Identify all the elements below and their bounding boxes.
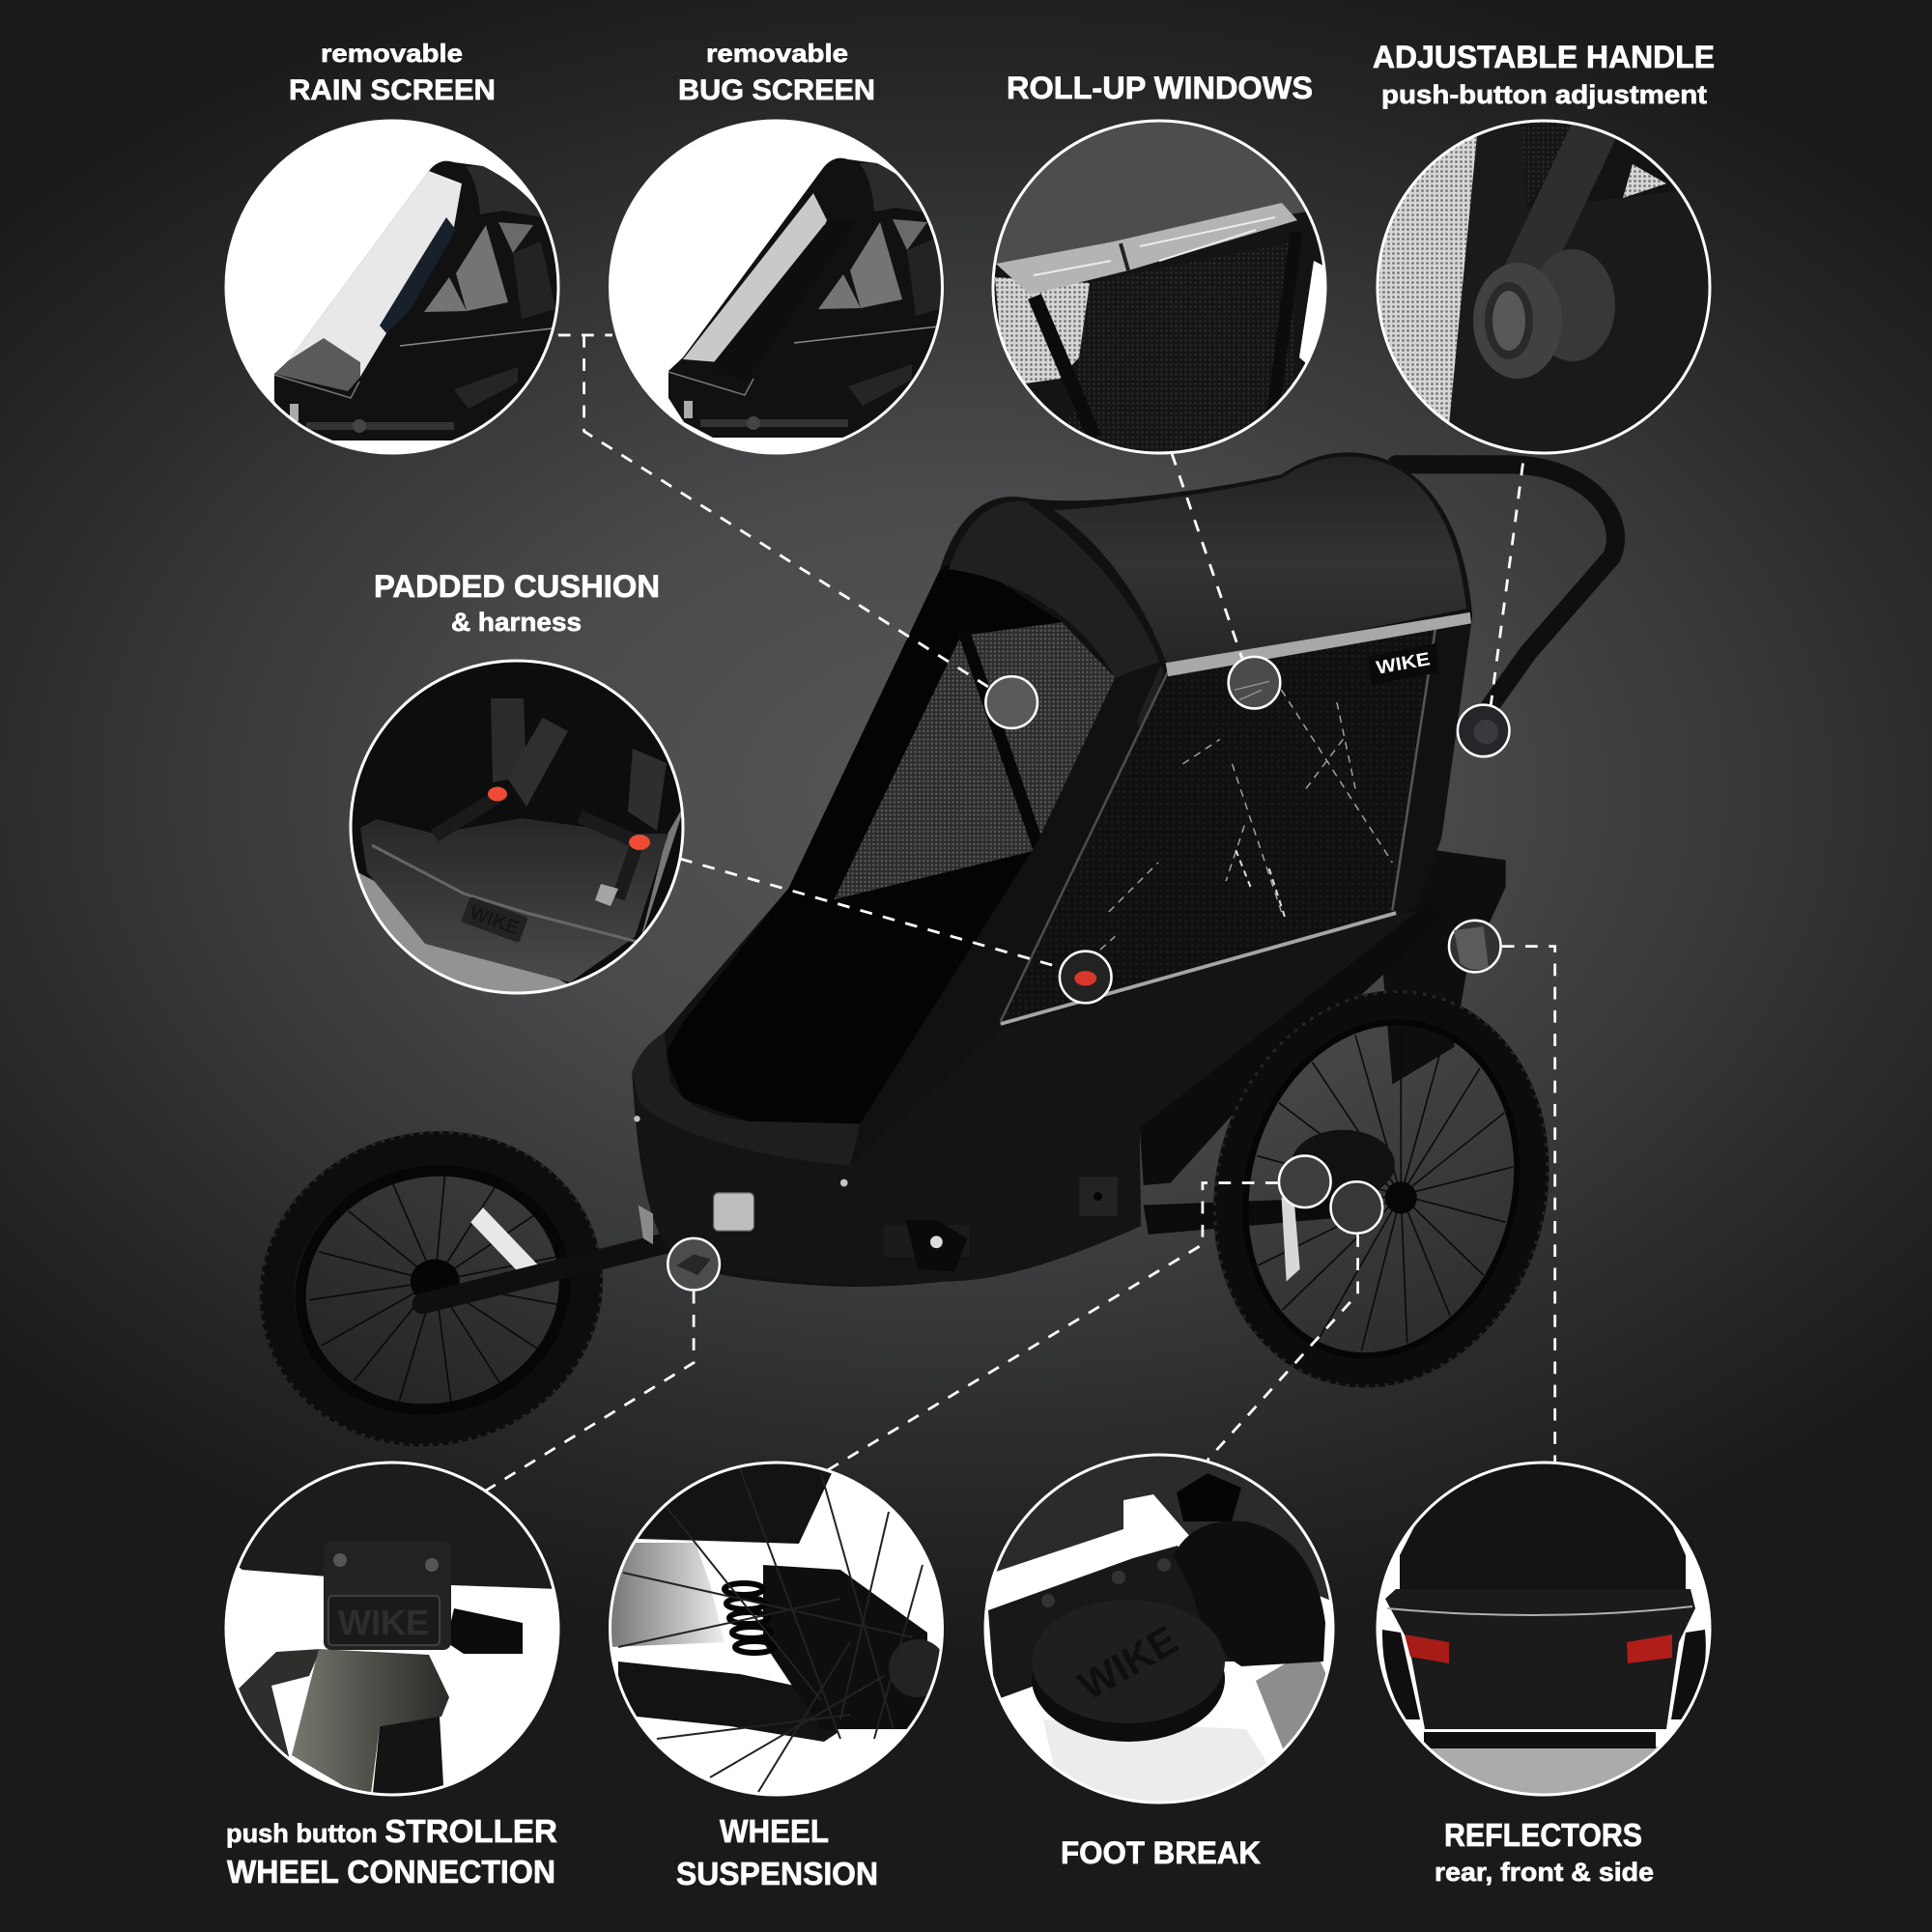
clear window [1001, 629, 1435, 1024]
connector: padded cushion [680, 859, 1060, 967]
hub cap [889, 1639, 947, 1697]
heading: rain screen [289, 39, 496, 106]
detail ring: harness [1060, 952, 1112, 1003]
mesh cover [683, 193, 827, 362]
heading: stroller wheel connection [226, 1813, 557, 1889]
frame bar [1424, 1732, 1656, 1748]
side wall [638, 802, 686, 952]
detail ring: foot break [1331, 1181, 1382, 1234]
panel: foot break [985, 1449, 1338, 1806]
hub body [763, 1565, 927, 1729]
bowl rim [632, 1033, 860, 1166]
hub [1473, 263, 1562, 379]
panel: stroller wheel connection [222, 1449, 560, 1802]
right reflector [1627, 1634, 1672, 1663]
strap [1035, 297, 1094, 438]
rear cylinder [1540, 249, 1615, 361]
panel: roll-up windows [991, 120, 1327, 454]
heading: bug screen [678, 39, 875, 106]
heading: bug screen: BUG SCREEN [678, 74, 875, 106]
front arch panel [949, 501, 1163, 739]
heading: padded cushion: & harness [451, 608, 582, 637]
heading: bug screen: removable [706, 39, 848, 68]
detail ring: window roll [1229, 657, 1280, 708]
logo patch: WIKE [467, 902, 522, 939]
connector: adjustable handle [1491, 464, 1523, 705]
connector: foot break [1208, 1235, 1358, 1460]
clear rain cover [289, 171, 462, 377]
connector lines [486, 335, 1555, 1491]
side mesh [995, 277, 1090, 386]
clamp [884, 1220, 970, 1271]
logo: WIKE [338, 1603, 429, 1642]
stroller photo [226, 452, 1616, 1483]
pedal [1032, 1616, 1225, 1742]
heading: reflectors: REFLECTORS [1444, 1817, 1642, 1853]
panel: adjustable handle [1372, 116, 1729, 464]
heading: foot break: FOOT BREAK [1061, 1835, 1261, 1870]
frame edge [1271, 232, 1296, 425]
roof panel [1054, 457, 1466, 668]
grey strut [1256, 1647, 1338, 1777]
canopy back [1400, 1459, 1686, 1623]
front pillar [858, 661, 1163, 1164]
window gap [1299, 261, 1323, 363]
rear wheel [1172, 953, 1591, 1424]
logo tag [1368, 643, 1438, 685]
webbing [595, 884, 618, 906]
side mesh window [835, 622, 1115, 899]
logo patch [461, 896, 528, 943]
fabric [637, 1459, 838, 1544]
strap pads [491, 698, 526, 782]
heading: padded cushion [374, 569, 660, 637]
heading: wheel suspension: SUSPENSION [676, 1856, 878, 1891]
heading: stroller wheel connection: WHEEL CONNECTION [227, 1854, 555, 1889]
cushion lip [372, 845, 638, 942]
heading: wheel suspension: WHEEL [720, 1813, 829, 1849]
panel: rain screen [226, 121, 570, 453]
latch tab [446, 1608, 523, 1654]
light mesh [1379, 136, 1477, 422]
arm [618, 1662, 838, 1742]
rear frame [1140, 902, 1444, 1235]
detail ring: wheel connection [668, 1238, 720, 1290]
corner reflector [639, 1205, 653, 1244]
detail ring: suspension [1279, 1155, 1331, 1208]
panel: padded cushion [351, 661, 686, 1000]
spring [724, 1583, 774, 1653]
heading: wheel suspension [676, 1813, 878, 1891]
arm [988, 1546, 1246, 1700]
heading: rain screen: RAIN SCREEN [289, 74, 496, 106]
mesh panel [1063, 242, 1296, 464]
tread [372, 1717, 444, 1802]
arm [1523, 121, 1599, 280]
heading: stroller wheel connection: push button STROLLER [226, 1813, 557, 1849]
left reflector [1405, 1634, 1449, 1663]
panel: reflectors [1378, 1459, 1710, 1795]
trim [1387, 1606, 1692, 1615]
canopy [996, 122, 1306, 265]
spokes [618, 1466, 923, 1792]
panel: wheel suspension [611, 1459, 947, 1795]
connector: reflectors [1502, 947, 1555, 1463]
lower body shell [632, 912, 1417, 1285]
connector: wheel suspension [828, 1182, 1278, 1470]
heading: roll-up windows: ROLL-UP WINDOWS [1007, 71, 1313, 105]
plate [324, 1541, 451, 1650]
red buckles [488, 786, 507, 802]
trailer body [632, 452, 1472, 1287]
logo tag: WIKE [1375, 649, 1432, 679]
detail ring: mesh [985, 676, 1037, 728]
detail rings on stroller [668, 657, 1509, 1290]
heading: reflectors: rear, front & side [1435, 1858, 1654, 1887]
seat opening [664, 563, 1115, 1123]
front wheel [226, 1094, 666, 1483]
screws [1041, 1594, 1055, 1607]
cylinder [1174, 1520, 1325, 1666]
heading: adjustable handle [1373, 40, 1715, 109]
rolled window [996, 203, 1297, 295]
heading: rain screen: removable [321, 39, 463, 68]
heading: reflectors [1435, 1817, 1654, 1887]
cushion [360, 818, 668, 982]
side wheels [1382, 1630, 1420, 1719]
floor [1381, 1747, 1710, 1795]
mesh strap [963, 631, 1038, 848]
fabric edge [1449, 135, 1478, 423]
basket [1385, 1589, 1695, 1729]
dark background [985, 1449, 1338, 1604]
rivets [634, 1116, 848, 1186]
top bolt [1177, 1473, 1241, 1521]
heading: adjustable handle: push-button adjustment [1381, 80, 1707, 109]
tyre [237, 1649, 321, 1768]
connector: stroller wheel [486, 1292, 694, 1491]
stem [292, 1649, 449, 1802]
grey background [611, 1543, 724, 1647]
rear basket [1380, 848, 1506, 1084]
floor light [353, 869, 570, 1000]
heading: padded cushion: PADDED CUSHION [374, 569, 660, 604]
square mount [1079, 1177, 1118, 1216]
connector: roll-up windows [1172, 453, 1242, 658]
connector: rain and bug screen [558, 335, 989, 688]
side reflector plate [714, 1193, 754, 1231]
detail ring: reflector [1449, 921, 1501, 972]
panel: bug screen [611, 121, 964, 453]
lower shading [1043, 1719, 1294, 1806]
top mesh [1522, 122, 1569, 205]
detail ring: handle button [1458, 705, 1509, 756]
button [1492, 291, 1525, 351]
buckle straps [435, 797, 638, 898]
heading: adjustable handle: ADJUSTABLE HANDLE [1373, 40, 1715, 74]
fabric [222, 1449, 560, 1589]
handle [1396, 465, 1616, 708]
reflective band [1166, 612, 1471, 676]
pedal logo: WIKE [1071, 1616, 1185, 1709]
